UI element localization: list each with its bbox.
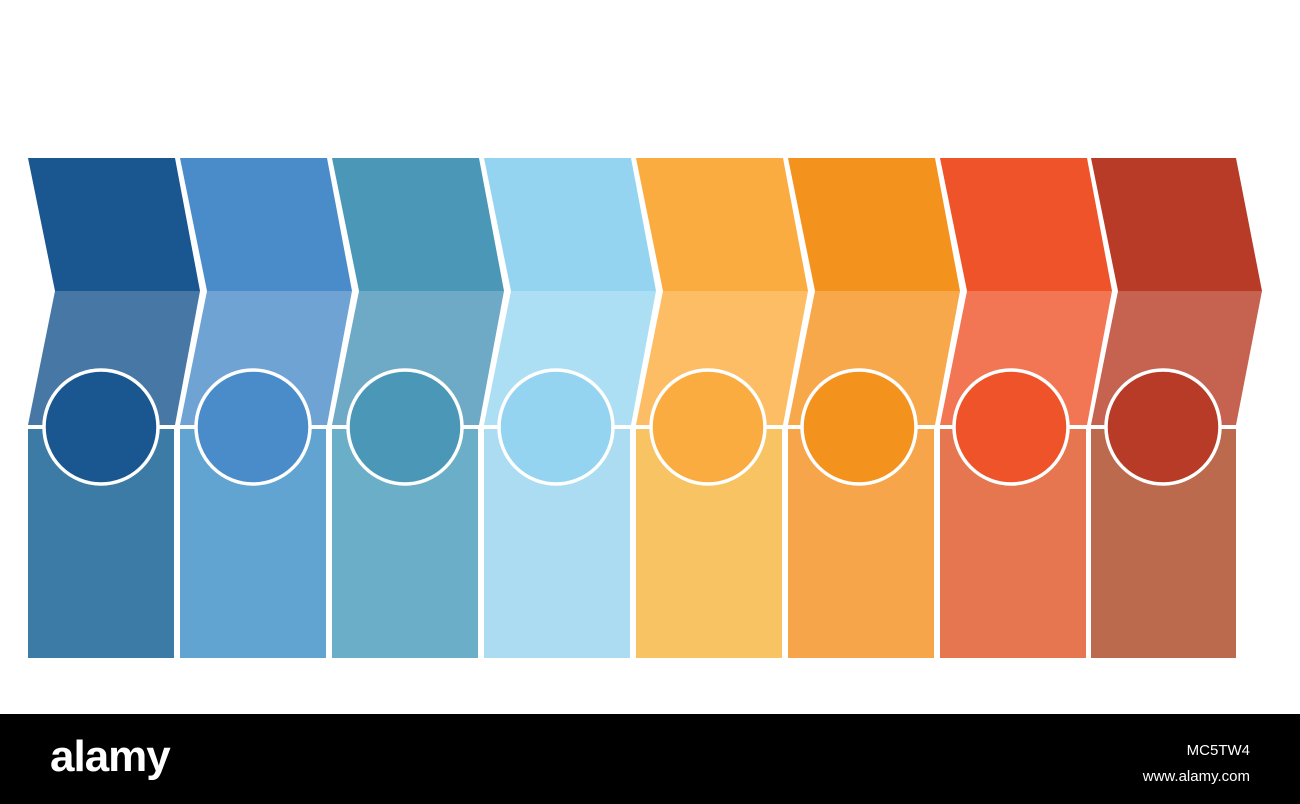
- logo text: alamy: [50, 732, 170, 781]
- column 5: [636, 158, 808, 658]
- column 6: [788, 158, 960, 658]
- timeline line: [28, 425, 1236, 429]
- column 8: [1091, 158, 1262, 658]
- image id: www.alamy.com: [1143, 768, 1250, 785]
- column 3: [332, 158, 504, 658]
- image id: [1142, 742, 1250, 785]
- footer bar: [0, 714, 1300, 804]
- circles: [44, 370, 1220, 484]
- column 7: [940, 158, 1112, 658]
- column 4: [484, 158, 656, 658]
- image id: MC5TW4: [1187, 742, 1250, 759]
- column 2: [180, 158, 352, 658]
- column 1: [28, 158, 200, 658]
